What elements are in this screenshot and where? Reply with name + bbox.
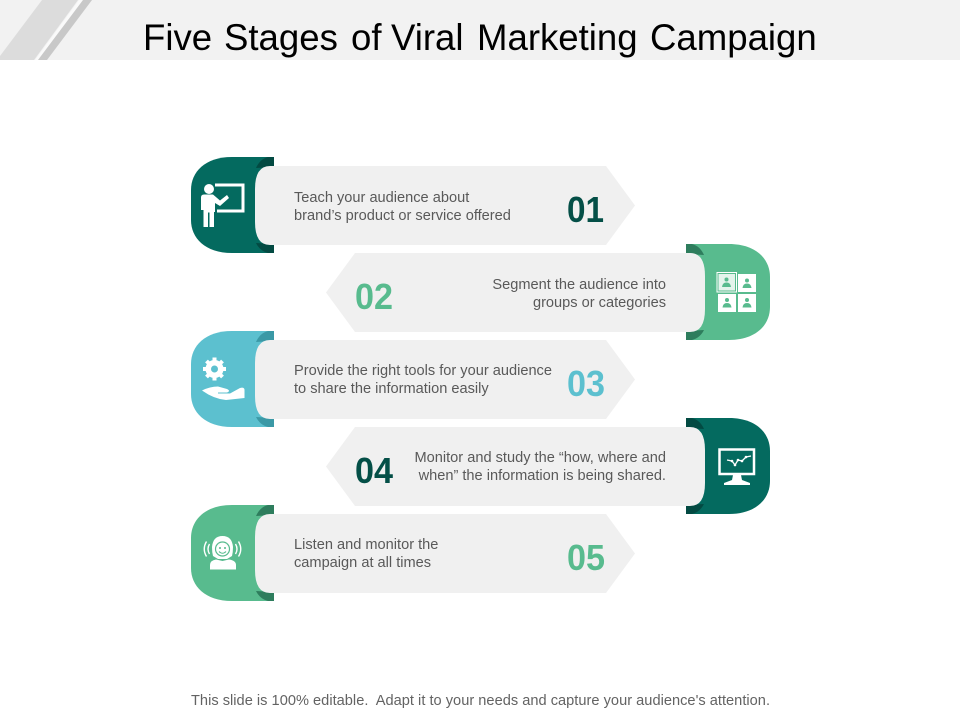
tab: stage 02 xyxy=(686,244,770,340)
number: 05: 05 xyxy=(567,537,605,578)
icon: gear over hand xyxy=(202,358,245,400)
arrow banner: stage 05 xyxy=(255,514,635,593)
footer note: This slide is 100% editable. Adapt it to your needs and capture your audience's attention. xyxy=(191,693,770,709)
icon: listening woman with sound waves xyxy=(204,536,241,570)
title: Viral xyxy=(391,17,464,58)
icon: audience segments grid xyxy=(717,272,756,312)
number: 03: 03 xyxy=(567,363,605,404)
title: Marketing xyxy=(477,17,638,58)
header band xyxy=(0,0,960,60)
tab: stage 01 xyxy=(191,157,274,253)
tab: stage 04 xyxy=(686,418,770,514)
description: stage 01: Teach your audience about xyxy=(294,190,469,206)
title: of xyxy=(351,17,382,58)
panel: stage 05 xyxy=(191,505,635,601)
panel: stage 01 xyxy=(191,157,635,253)
description: stage 04: Monitor and study the “how, where and xyxy=(414,450,666,466)
number: 04: 04 xyxy=(355,450,393,491)
description: stage 05: Listen and monitor the xyxy=(294,537,438,553)
panel: stage 03 xyxy=(191,331,635,427)
description: stage 05: campaign at all times xyxy=(294,555,431,571)
arrow banner: stage 04 xyxy=(326,427,705,506)
description: stage 03: Provide the right tools for your audience xyxy=(294,363,552,379)
panel: stage 04 xyxy=(326,418,770,514)
arrow banner: stage 03 xyxy=(255,340,635,419)
panel: stage 02 xyxy=(326,244,770,340)
description: stage 02: Segment the audience into xyxy=(492,277,666,293)
description: stage 04: when” the information is being shared. xyxy=(418,468,666,484)
number: 02: 02 xyxy=(355,276,393,317)
title: Five xyxy=(143,17,212,58)
description: stage 01: brand’s product or service offered xyxy=(294,208,511,224)
description: stage 02: groups or categories xyxy=(533,295,666,311)
arrow banner: stage 01 xyxy=(255,166,635,245)
description: stage 03: to share the information easily xyxy=(294,381,489,397)
tab: stage 03 xyxy=(191,331,274,427)
icon: presenter at board xyxy=(201,184,244,227)
tab: stage 05 xyxy=(191,505,274,601)
number: 01: 01 xyxy=(567,189,604,230)
title: Campaign xyxy=(650,17,817,58)
title: Stages xyxy=(224,17,338,58)
arrow banner: stage 02 xyxy=(326,253,705,332)
icon: monitor with line chart xyxy=(720,450,754,485)
